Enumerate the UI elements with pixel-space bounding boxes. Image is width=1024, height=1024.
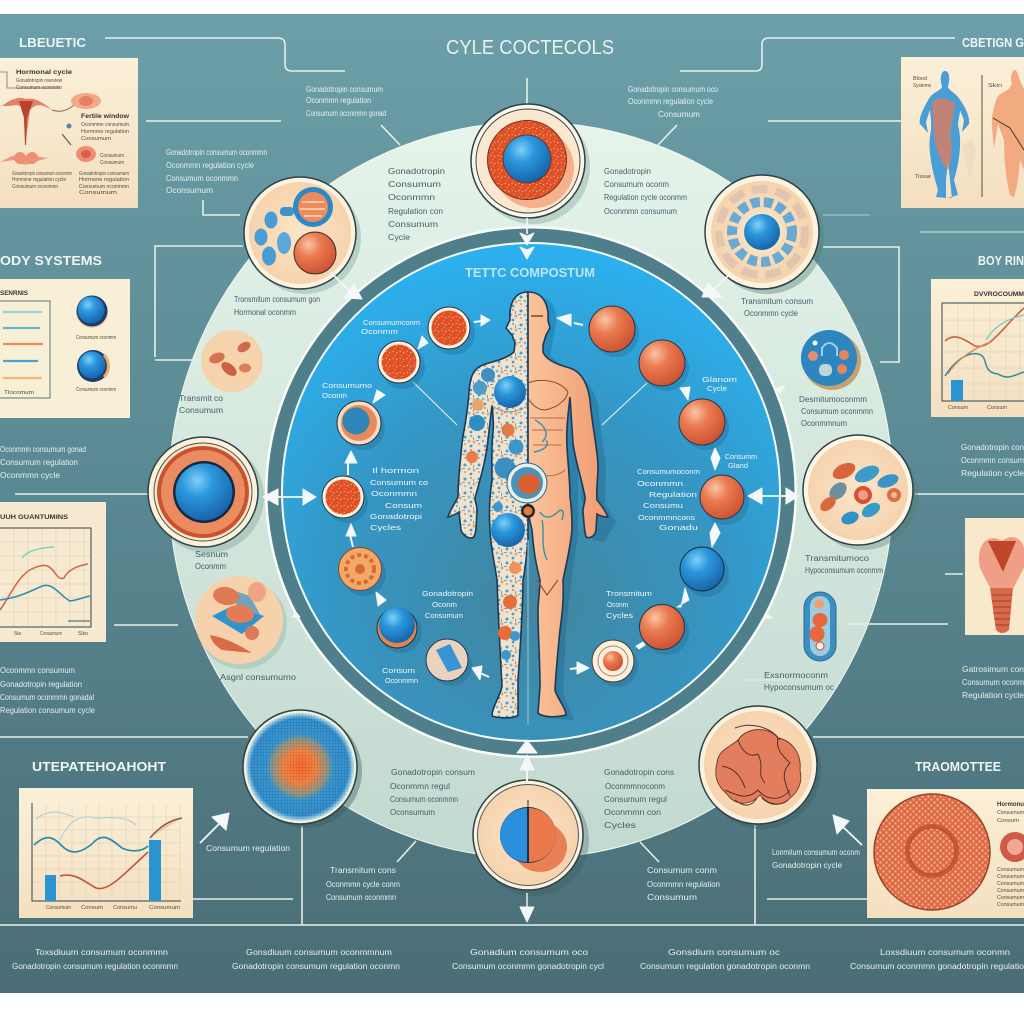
node: top cell: [471, 104, 590, 224]
text block: capsule caption: Exsnormoconm: [764, 671, 828, 680]
text block: top left 1: Gonadotropin consumum: [306, 85, 383, 94]
text block: right ring upper: Consumum oconmmn: [801, 407, 873, 416]
footer text 5: Consumum oconmmn gonadotropin regulatio: [850, 962, 1024, 971]
text block: left small: [179, 394, 224, 415]
panel: line chart right: DVVROCOUMM: [974, 292, 1024, 298]
text block: lower right caption: Lonmitum consumum oconm: [772, 848, 860, 857]
footer text 3: Gonadium consumum oco: [470, 948, 589, 957]
text block: top right 1: Gonadotropin consumum oco: [628, 85, 718, 94]
text block: inner right mid: Oconmmn: [637, 479, 683, 488]
text block: top left 2: Oconmmn regulation cycle: [166, 161, 255, 170]
footer text 1: Toxsdiuum consumum oconmmn: [35, 948, 168, 957]
node: bottom half cell: [473, 780, 589, 896]
panel: cell cross-section: Hormonu: [997, 802, 1024, 808]
text block: inner left mid: Gonadotropi: [370, 512, 422, 521]
node: top right cell: [705, 175, 824, 294]
footer text 5: Loxsdiuum consumum oconmn: [880, 948, 1010, 957]
text block: inner left mid: Il hormon: [372, 466, 419, 475]
text block: right ring upper: Desmitumoconmm: [799, 395, 867, 404]
panel: body systems: Tlocomum: [4, 390, 34, 396]
title: CYLE COCTECOLS: [446, 37, 614, 59]
panel: reproductive anatomy: Hormone regulation: [81, 129, 129, 135]
node: lower left peach tissue: [195, 576, 287, 669]
panel: body comparison: Tissue: [915, 174, 931, 180]
panel: reproductive anatomy: Consumum: [100, 160, 124, 166]
panel: left chart: [0, 502, 106, 642]
heading: lower right: TRAOMOTTEE: [915, 759, 1001, 774]
text block: top left 1: [306, 85, 386, 118]
text block: inner left upper: Consumumo: [322, 381, 372, 390]
footer text 1: [12, 948, 178, 971]
text block: bottom ring right: Consumum regul: [604, 795, 667, 804]
panel: reproductive anatomy: Consumum: [79, 190, 117, 196]
panel: cell cross-section: Consumum: [997, 895, 1024, 901]
node: left big cell: [148, 437, 264, 553]
text block: inner lower left: [422, 589, 473, 620]
inner cell 13: [639, 340, 689, 391]
panel: line chart right: Consum: [948, 405, 968, 411]
text block: top ring left: [388, 167, 445, 242]
text block: left side lower: Regulation consumum cycle: [0, 706, 96, 715]
text block: top left 1: Consumum oconmmn gonad: [306, 109, 386, 118]
footer text 2: Gonadotropin consumum regulation oconmn: [232, 962, 400, 971]
text block: lower left caption: Asgnl consumumo: [220, 673, 297, 682]
text block: inner right mid: [637, 467, 700, 532]
text block: bottom ring right: Cycles: [604, 821, 636, 830]
text block: bottom right inner: Consumum: [647, 893, 697, 902]
text block: bottom ring right: [604, 768, 674, 830]
footer text 4: Consumum regulation gonadotropin oconmn: [640, 962, 810, 971]
text block: bottom left inner: [326, 866, 400, 902]
text block: inner left upper: [322, 381, 372, 400]
inner cell 2: [378, 341, 425, 389]
text block: bottom ring right: Oconmmn con: [604, 808, 661, 817]
text block: bottom left inner: Transmitum cons: [330, 866, 396, 875]
footer text 2: [232, 948, 400, 971]
node: small peach cell left: [201, 330, 263, 392]
text block: top left 2: [166, 148, 267, 195]
text block: inner left upper: Oconm: [322, 391, 347, 400]
inner cell 10: [680, 547, 729, 597]
text block: bottom right inner: Consumum conm: [647, 866, 717, 875]
inner cell ring: [322, 306, 749, 687]
text block: inner right mid: Regulation: [649, 490, 697, 499]
inner cell 1: [428, 307, 475, 355]
text block: top left 2: Oconsumum: [166, 186, 213, 195]
text block: top ring left: Oconmmn: [388, 193, 435, 202]
panel: left chart: Sto: [78, 631, 88, 637]
panel: reproductive anatomy: Hormonal cycle: [16, 70, 73, 76]
inner cell 8: [592, 640, 638, 687]
text block: inner left mid: [370, 466, 428, 532]
footer text 4: [640, 948, 810, 971]
text block: inner right small: Consumm: [725, 452, 757, 461]
text block: left small: Consumum: [179, 406, 223, 415]
panel: cell cross-section: Consumum: [997, 810, 1024, 816]
panel: reproductive anatomy: Consumum oconmmn: [16, 85, 62, 91]
panel: body systems: [0, 279, 130, 418]
body: left half microscopic: [448, 292, 528, 718]
node: right cell cluster: [803, 435, 918, 550]
text block: top right 1: [628, 85, 718, 119]
footer text 3: Consumum oconmmn gonadotropin cycl: [452, 962, 604, 971]
text block: inner right mid: Consumu: [643, 501, 683, 510]
text block: top ring right: [604, 167, 687, 216]
body figure: [448, 292, 616, 725]
text block: left cell caption: [195, 550, 228, 571]
text block: left cell caption: Oconmm: [195, 562, 226, 571]
panel: cell cross-section: [867, 789, 1024, 918]
text block: chart caption: Consumum regulation: [206, 844, 290, 853]
panel: body comparison: [901, 57, 1024, 208]
text block: right side lower: Regulation cycle: [962, 691, 1024, 700]
text block: inner right small: Gland: [728, 461, 748, 470]
footer text 3: [452, 948, 604, 971]
footer text 2: Gonsdiuum consumum oconmmnum: [246, 948, 392, 957]
panel: organ illustration: [965, 518, 1024, 635]
text block: inner top left: [361, 318, 420, 336]
panel: lower left chart: [19, 788, 193, 918]
text block: right cell caption: Transmitumoco: [805, 554, 870, 563]
text block: top ring left: Consumum: [388, 220, 438, 229]
panel: left chart: UUH GUANTUMINS: [0, 515, 68, 521]
text block: inner left mid: Cycles: [370, 523, 401, 532]
panel: reproductive anatomy: Oconmmn consumum: [81, 122, 129, 128]
node: brain organ: [699, 706, 821, 829]
panel: body comparison: Blood: [913, 76, 927, 82]
text block: right ring upper: [799, 395, 873, 428]
text block: top ring left: Cycle: [388, 233, 411, 242]
text block: left side upper: Consumum regulation: [0, 458, 78, 467]
heading: central composition: TETTC COMPOSTUM: [465, 265, 595, 280]
panel: body systems: SENRNIS: [0, 291, 28, 297]
heading: lower left: UTEPATEHOAHOHT: [32, 759, 166, 774]
panel: body comparison: Systems: [913, 83, 931, 89]
text block: inner lower right: Cycles: [606, 611, 633, 620]
text block: inner lower right: [606, 589, 652, 620]
panel: body comparison: Skin: [988, 83, 1002, 89]
panel: reproductive anatomy: Gonadotropin overview: [16, 78, 62, 84]
text block: inner right upper: Cycle: [707, 384, 727, 393]
text block: inner bottom left: Oconmmn: [385, 676, 418, 685]
inner cell 14: [589, 306, 639, 357]
text block: upper left ring: [234, 295, 320, 317]
text block: left side lower: Gonadotropin regulation: [0, 680, 82, 689]
text block: inner lower left: Oconm: [432, 600, 457, 609]
panel: reproductive anatomy: Hormone regulation: [79, 177, 129, 183]
text block: bottom left inner: Consumum oconmmn: [326, 893, 396, 902]
panel: reproductive anatomy: Gonadotropin consumum oconmmn: [12, 171, 72, 177]
panel: body systems: Consumum oconmm: [76, 387, 116, 393]
text block: top right 1: Consumum: [658, 110, 700, 119]
inner cell 9: [640, 604, 689, 655]
inner cell 11: [700, 475, 749, 525]
body: anatomy details: [528, 292, 568, 725]
text block: bottom left inner: Oconmmn cycle conm: [326, 880, 400, 889]
text block: top ring right: Consumum oconm: [604, 180, 669, 189]
text block: left side upper: Oconmmn cycle: [0, 471, 61, 480]
text block: top ring right: Regulation cycle oconmm: [604, 193, 687, 202]
panel: lower left chart: Consum: [81, 905, 103, 911]
text block: inner top left: Oconmm: [361, 327, 398, 336]
text block: inner left mid: Consum: [385, 501, 422, 510]
text block: top left 2: Gonadotropin consumum oconmmn: [166, 148, 267, 157]
text block: right cell caption: [805, 554, 883, 575]
footer text 1: Gonadotropin consumum regulation oconmmn: [12, 962, 178, 971]
text block: left side lower: Consumum oconmmn gonadal: [0, 693, 94, 702]
text block: upper right ring: Transmitum consum: [741, 297, 813, 306]
text block: top ring right: Oconmmn consumum: [604, 207, 677, 216]
text block: bottom ring left: Consumum oconmmn: [390, 795, 458, 804]
panel: cell cross-section: Consumum: [997, 902, 1024, 908]
text block: upper left ring: Tronsmitum consumum gon: [234, 295, 320, 304]
text block: upper right ring: [741, 297, 813, 318]
text block: right side lower: Gatrosimum con: [962, 665, 1024, 674]
heading: top left: LBEUETIC: [19, 35, 87, 50]
text block: top left 2: Consumum oconmmn: [166, 174, 238, 183]
node: bottom left blue spot: [243, 710, 362, 828]
panel: lower left chart: Consumum: [149, 905, 180, 911]
text block: top ring left: Consumum: [388, 180, 441, 189]
text block: lower right caption: [772, 848, 860, 870]
node: small blue cell right: [801, 330, 861, 390]
panel: reproductive anatomy: Gonadotropin consumum: [79, 171, 129, 177]
text block: bottom ring right: Oconmmnoconm: [605, 782, 665, 791]
text block: upper right ring: Oconmmn cycle: [744, 309, 799, 318]
text block: bottom ring left: Gonadotropin consum: [391, 768, 475, 777]
text block: inner right mid: Consumumoconm: [637, 467, 700, 476]
panel: reproductive anatomy: Hormone regulation cycle: [12, 177, 66, 183]
inner cell 4: [322, 476, 368, 523]
text block: right side upper: [961, 443, 1024, 478]
footer text 4: Gonsdium consumum oc: [668, 948, 780, 957]
inner cell 3: [337, 401, 385, 450]
text block: top ring right: Gonadotropin: [604, 167, 651, 176]
text block: inner right mid: Oconmmncons: [638, 513, 695, 522]
arrows: [200, 218, 862, 922]
panel: line chart right: Consum: [987, 405, 1007, 411]
text block: inner right small: [725, 452, 757, 470]
text block: capsule caption: Hypoconsumum oc: [764, 683, 834, 692]
text block: top ring left: Regulation con: [388, 207, 443, 216]
footer text 5: [850, 948, 1024, 971]
panel: reproductive anatomy: [0, 58, 138, 208]
panel: line chart right: [931, 279, 1024, 417]
text block: bottom right inner: Oconmmn regulation: [647, 880, 720, 889]
text block: left side upper: Oconmmn consumum gonad: [0, 445, 86, 454]
panel: reproductive anatomy: Consumum oconmmn: [12, 184, 58, 190]
inner cell 6: [377, 607, 422, 653]
text block: top left 1: Oconmmn regulation: [306, 96, 371, 105]
text block: inner top left: Consumumconm: [363, 318, 420, 327]
text block: left side lower: [0, 666, 96, 715]
text block: left small: Transmit co: [179, 394, 224, 403]
text block: inner right upper: [702, 375, 737, 393]
panel: reproductive anatomy: Fertile window: [81, 114, 129, 120]
text block: inner lower right: Oconm: [607, 600, 628, 609]
panel: reproductive anatomy: Consumum: [100, 153, 124, 159]
text block: left side lower: Oconmmn consumum: [0, 666, 75, 675]
panel: left chart: Sta: [14, 631, 21, 637]
text block: inner bottom left: [382, 666, 418, 685]
text block: inner right upper: Glanom: [702, 375, 737, 384]
outer pale ring: [169, 122, 893, 858]
heading: body systems: ODY SYSTEMS: [0, 253, 102, 268]
text block: inner right mid: Gonadu: [659, 523, 698, 532]
text block: capsule caption: [764, 671, 834, 692]
text block: left side upper: [0, 445, 86, 480]
panel: cell cross-section: Consumum: [997, 867, 1024, 873]
text block: inner lower left: Gonadotropin: [422, 589, 473, 598]
text block: top right 1: Oconmmn regulation cycle: [628, 97, 713, 106]
panel: cell cross-section: Consumum: [997, 888, 1024, 894]
text block: right side upper: Gonadotropin con: [961, 443, 1024, 452]
inner cell 5: [338, 548, 386, 596]
panel: cell cross-section: Consumum: [997, 881, 1024, 887]
text block: inner bottom left: Consum: [382, 666, 415, 675]
text block: bottom ring right: Gonadotropin cons: [604, 768, 674, 777]
text block: top ring left: Gonadotropin: [388, 167, 445, 176]
text block: inner lower right: Tronsmitum: [606, 589, 652, 598]
text block: inner lower left: Consumum: [425, 611, 463, 620]
panel: cell cross-section: Consum: [997, 818, 1019, 824]
panel: lower left chart: Consumum: [46, 905, 71, 911]
central blue circle: [283, 244, 779, 740]
text block: bottom ring left: Oconsumum: [390, 808, 435, 817]
text block: inner left mid: Oconmmn: [371, 489, 417, 498]
node: capsule: [804, 592, 836, 661]
text block: right cell caption: Hypoconsumum oconmm: [805, 566, 883, 575]
node: top left cell group: [244, 177, 361, 294]
body: cells: [466, 368, 547, 660]
inner cell 12: [679, 399, 729, 450]
inner cell 7: [426, 639, 472, 686]
panel: left chart: Consumum: [40, 631, 62, 637]
panel: body systems: Consumum oconmm: [76, 335, 116, 341]
text block: right side upper: Regulation cycle: [961, 469, 1024, 478]
panel: lower left chart: Consumu: [113, 905, 137, 911]
text block: bottom right inner: [647, 866, 720, 902]
body: right half skin: [528, 292, 608, 717]
text block: bottom ring left: [390, 768, 475, 817]
panel: reproductive anatomy: Consumum: [81, 136, 111, 142]
text block: left cell caption: Sesnum: [195, 550, 228, 559]
text block: lower right caption: Gonadotropin cycle: [772, 861, 843, 870]
text block: bottom ring left: Oconmmn regul: [390, 782, 450, 791]
panel: cell cross-section: Consumum: [997, 874, 1024, 880]
text block: upper left ring: Hormonal oconmm: [234, 308, 296, 317]
text block: right ring upper: Oconmmnum: [801, 419, 847, 428]
panel: reproductive anatomy: Consumum oconmmn: [79, 184, 129, 190]
text block: right side lower: [962, 665, 1024, 700]
text block: inner left mid: Consumum co: [370, 478, 428, 487]
